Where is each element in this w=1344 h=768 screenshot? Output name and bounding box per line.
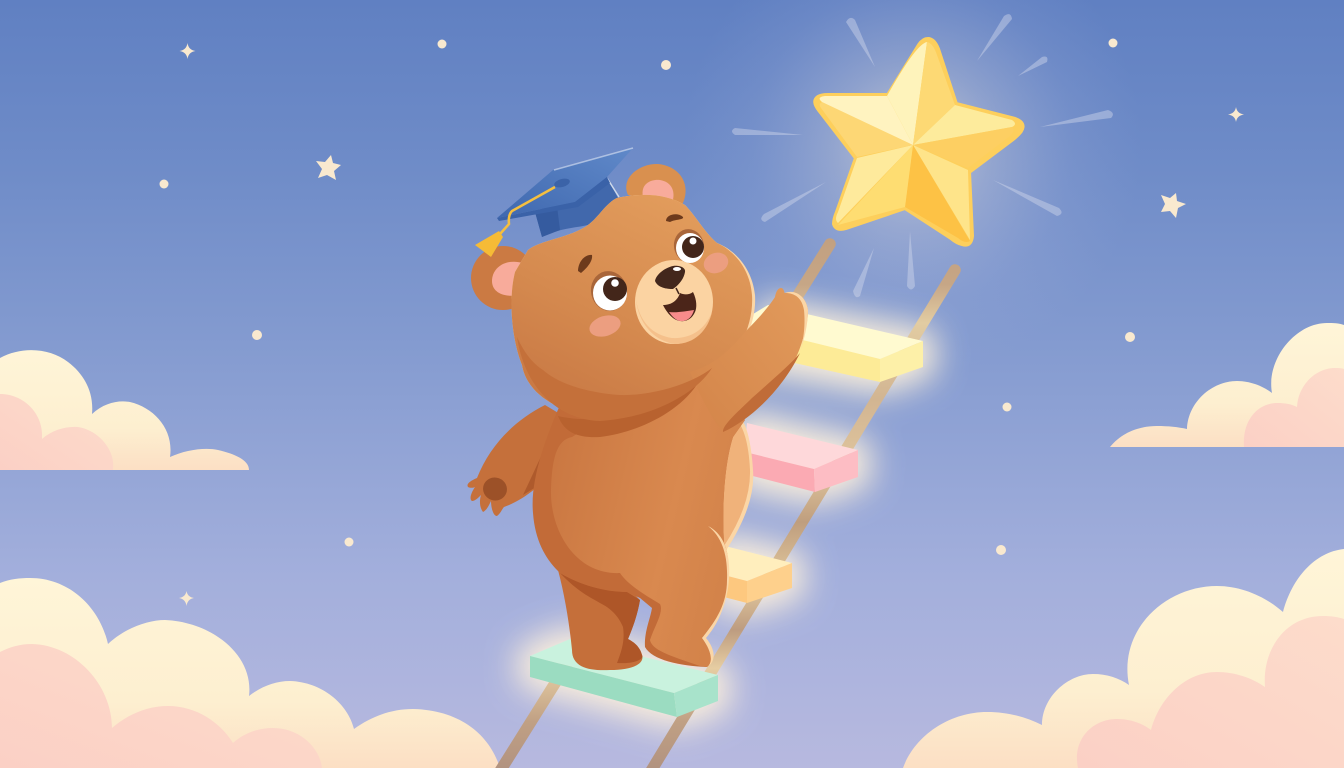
bear: raised arm (690, 288, 808, 432)
cloud: top right (1110, 323, 1344, 447)
star glow (640, 0, 1200, 400)
bear: eyebrows (578, 255, 592, 273)
bear: left (far) leg (558, 560, 642, 670)
cloud: bottom right (903, 549, 1344, 768)
bear: head shadow crescent (517, 337, 712, 421)
cap button (553, 177, 571, 189)
bear: muzzle (635, 260, 713, 344)
star rays (732, 14, 1113, 297)
bear: head (511, 195, 755, 418)
bear: left eye (587, 268, 631, 314)
bear: belly (551, 380, 745, 667)
cloud: top left (0, 350, 249, 470)
tassel cord (500, 187, 555, 234)
step: orange (720, 546, 792, 603)
graduation cap (475, 148, 633, 257)
bear: body base (533, 380, 745, 667)
ladder rails (497, 244, 955, 768)
stars and dots (160, 38, 1244, 606)
bear: neck shadow (558, 376, 702, 437)
bear: mouth (663, 292, 696, 321)
step: mint (530, 639, 718, 717)
bear: hip highlight (702, 526, 729, 667)
tassel (475, 231, 503, 257)
star (815, 39, 1023, 245)
bear: nose (655, 266, 685, 289)
cap board (497, 148, 633, 218)
cap base (535, 177, 618, 237)
cloud: bottom left (0, 578, 500, 768)
bear: far leg shadow (560, 573, 642, 663)
star facets (887, 42, 927, 145)
bear: raised arm shadow (723, 353, 800, 432)
bear: paw highlight (785, 292, 808, 352)
bear: right ear (626, 164, 686, 205)
step glows (530, 312, 923, 717)
step: pink (745, 423, 858, 492)
bear: left ear (471, 246, 535, 310)
bear: left arm (467, 405, 570, 516)
bear: arm shadow and paw pad (523, 415, 570, 495)
bear: cheeks (587, 312, 623, 340)
bear (467, 148, 808, 670)
star outline (815, 39, 1023, 245)
bear: right eye (671, 226, 707, 266)
step: yellow (735, 305, 923, 382)
bear: back of body highlight (715, 415, 753, 552)
